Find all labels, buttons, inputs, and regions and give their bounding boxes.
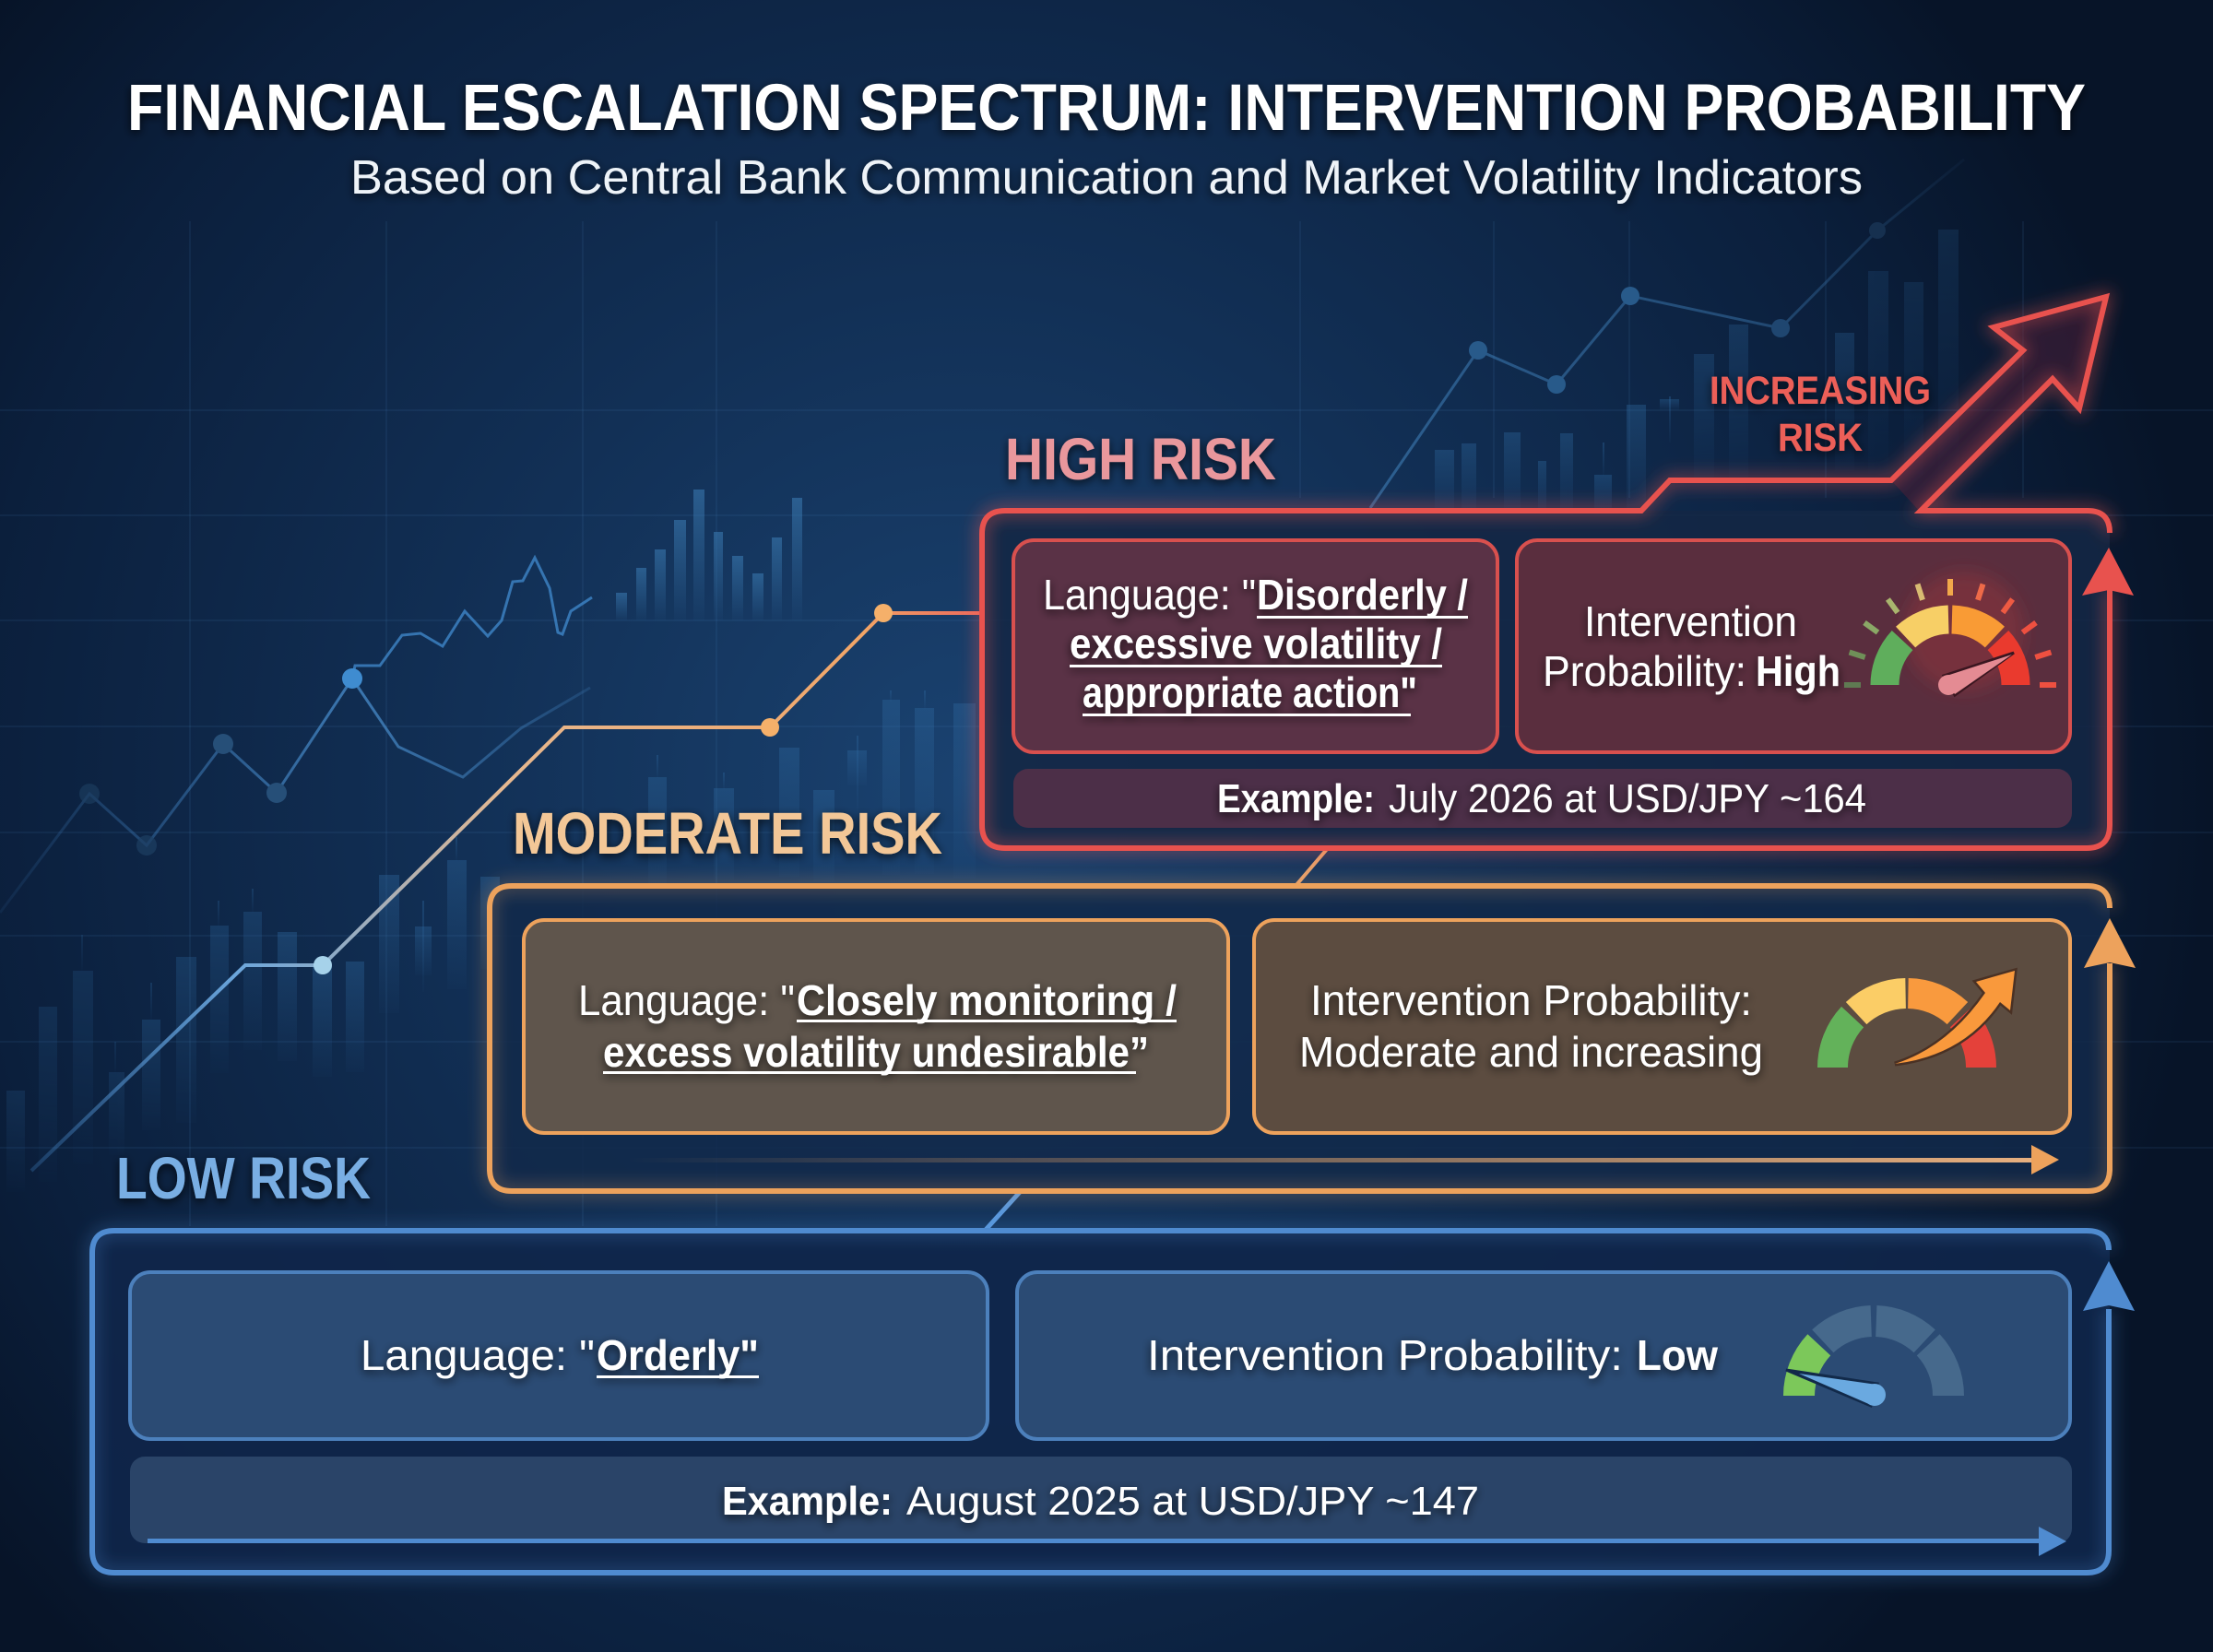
heading: high risk: HIGH RISK xyxy=(1005,426,1276,492)
panel outline with rising arrow xyxy=(982,297,2110,848)
panel outline xyxy=(92,1231,2109,1573)
box: intervention probability moderate xyxy=(1254,920,2070,1133)
chart: background candles lower left xyxy=(6,690,976,1192)
arrow: horizontal progress xyxy=(148,1527,2066,1556)
arrow: vertical risk arrow xyxy=(2083,1261,2135,1311)
box: language: Language: " xyxy=(578,976,795,1024)
box: language: appropriate action" xyxy=(1083,668,1417,716)
gauge: moderate xyxy=(1833,971,2015,1068)
connector: moderate to low xyxy=(985,1191,1021,1231)
box: language: excess volatility undesirable” xyxy=(603,1028,1149,1076)
box: language: Orderly" xyxy=(597,1331,759,1379)
panel: high risk xyxy=(982,297,2134,848)
box: intervention probability low xyxy=(1017,1272,2070,1439)
box: language xyxy=(130,1272,988,1439)
needle xyxy=(1786,1370,1886,1406)
box: language: Disorderly / xyxy=(1257,571,1468,619)
panel outline xyxy=(490,886,2110,1191)
box: intervention probability moderate: Intervention Probability: xyxy=(1310,976,1752,1024)
gauge: high xyxy=(1844,572,2056,695)
box: language: Language: " xyxy=(1043,571,1256,619)
connector: high to moderate xyxy=(1296,848,1328,886)
box: intervention probability high: Intervention xyxy=(1584,597,1797,645)
chart: background price line left xyxy=(0,558,592,913)
example bar: high xyxy=(1013,769,2072,828)
chart: background bars upper right xyxy=(1435,230,1959,514)
example bar: low xyxy=(130,1457,2072,1543)
chart: background price line right xyxy=(1370,159,1964,508)
needle xyxy=(1938,653,2014,695)
escalation path line xyxy=(31,604,982,1171)
gauge: low xyxy=(1786,1321,1948,1406)
box: language: Closely monitoring / xyxy=(797,976,1177,1024)
example bar: high: July 2026 at USD/JPY ~164 xyxy=(1389,776,1866,821)
subtitle: Based on Central Bank Communication and Market Volatility Indicators xyxy=(350,151,1863,205)
example bar: low: Example: xyxy=(722,1479,893,1524)
box: language: Language: " xyxy=(361,1331,595,1379)
example bar: low: August 2025 at USD/JPY ~147 xyxy=(906,1479,1479,1524)
example bar: high: Example: xyxy=(1217,776,1375,821)
panel: low risk xyxy=(92,1231,2135,1573)
label: increasing risk: INCREASING xyxy=(1710,369,1931,413)
chart: background volume bars centre xyxy=(616,490,802,620)
heading: moderate risk: MODERATE RISK xyxy=(513,800,942,867)
heading: low risk: LOW RISK xyxy=(116,1145,371,1211)
box: language xyxy=(1013,540,1497,752)
arrow: vertical risk arrow xyxy=(2084,918,2136,968)
box: intervention probability high: High xyxy=(1756,647,1840,695)
box: intervention probability low: Low xyxy=(1637,1331,1718,1379)
box: language xyxy=(524,920,1228,1133)
label: increasing risk: RISK xyxy=(1778,416,1863,460)
box: language: excessive volatility / xyxy=(1070,620,1442,667)
box: intervention probability low: Intervention Probability: xyxy=(1147,1331,1623,1379)
panel: moderate risk xyxy=(490,886,2136,1191)
box: intervention probability high xyxy=(1517,540,2070,752)
arrow: vertical risk arrow xyxy=(2082,548,2134,596)
trend arrow xyxy=(1895,971,2015,1064)
box: intervention probability moderate: Moderate and increasing xyxy=(1299,1028,1763,1076)
box: intervention probability high: Probability: xyxy=(1543,647,1746,695)
label: increasing risk xyxy=(1710,369,1931,460)
arrow: horizontal progress xyxy=(627,1145,2059,1174)
